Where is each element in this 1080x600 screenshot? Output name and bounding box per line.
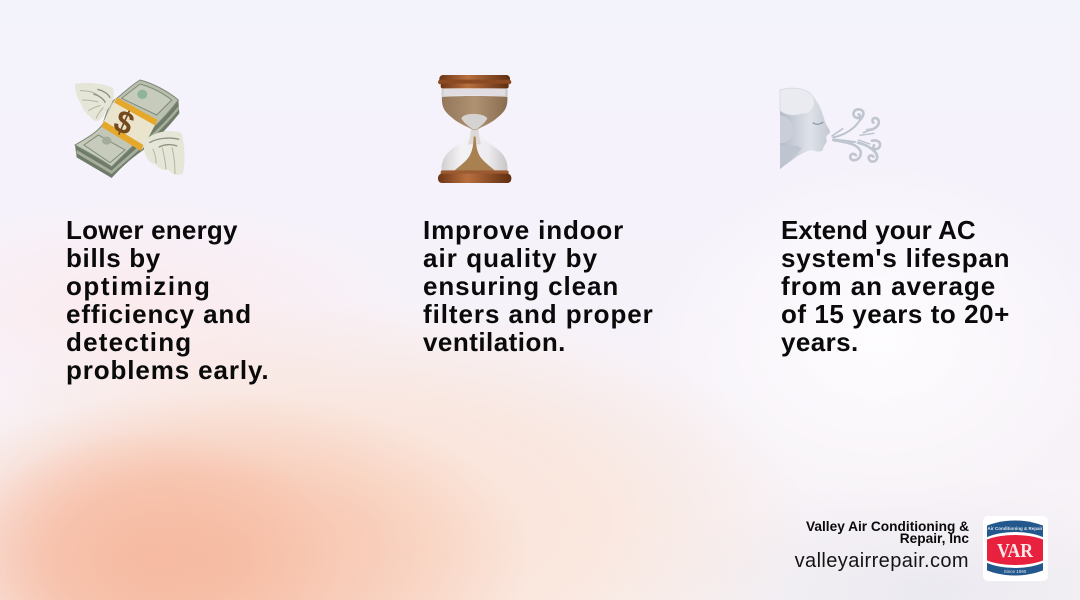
text block: lower energy bills bbox=[66, 215, 269, 385]
icon: hourglass bbox=[438, 75, 512, 183]
logo: VAR: Air Conditioning & Repair bbox=[988, 526, 1043, 531]
top cap bbox=[439, 75, 510, 83]
text block: improve indoor air quality: ensuring clean bbox=[423, 271, 619, 301]
company name bbox=[806, 519, 969, 546]
company name: Valley Air Conditioning & bbox=[806, 519, 969, 534]
text block: improve indoor air quality: ventilation. bbox=[423, 327, 566, 357]
eye bbox=[813, 122, 823, 124]
lower wing bbox=[143, 131, 185, 175]
text block: extend system lifespan bbox=[781, 215, 1010, 357]
icon: wind face bbox=[780, 88, 882, 170]
text block: lower energy bills: bills by bbox=[66, 243, 161, 273]
upper sand bbox=[442, 96, 507, 130]
upper wing bbox=[75, 83, 114, 121]
text block: extend system lifespan: years. bbox=[781, 327, 859, 357]
text block: lower energy bills: problems early. bbox=[66, 355, 269, 385]
text block: lower energy bills: Lower energy bbox=[66, 215, 238, 245]
head bbox=[780, 88, 830, 169]
text block: lower energy bills: efficiency and bbox=[66, 299, 252, 329]
text block: extend system lifespan: of 15 years to 20+ bbox=[781, 299, 1010, 329]
text block: extend system lifespan: Extend your AC bbox=[781, 215, 976, 245]
breath lines and swirls bbox=[832, 109, 880, 162]
money band bbox=[103, 98, 157, 149]
text block: improve indoor air quality: Improve indoor bbox=[423, 215, 624, 245]
text block: improve indoor air quality bbox=[423, 215, 654, 357]
text block: improve indoor air quality: filters and proper bbox=[423, 299, 654, 329]
text block: extend system lifespan: system's lifespan bbox=[781, 243, 1010, 273]
icon: money with wings bbox=[74, 80, 184, 178]
logo: VAR: VAR bbox=[997, 540, 1033, 562]
text block: lower energy bills: detecting bbox=[66, 327, 192, 357]
logo: VAR: Since 1990 bbox=[1004, 569, 1027, 574]
icon: money with wings: $ bbox=[109, 102, 140, 143]
bottom cap bbox=[441, 170, 509, 175]
stack side bbox=[75, 100, 179, 178]
logo: VAR bbox=[983, 516, 1048, 581]
text block: extend system lifespan: from an average bbox=[781, 271, 996, 301]
glass bbox=[441, 88, 508, 172]
company name: Repair, Inc bbox=[900, 531, 969, 546]
stack top bill bbox=[75, 80, 178, 167]
website url: valleyairrepair.com bbox=[795, 550, 969, 572]
text block: lower energy bills: optimizing bbox=[66, 271, 211, 301]
falling sand and pile bbox=[468, 130, 481, 144]
text block: improve indoor air quality: air quality by bbox=[423, 243, 598, 273]
hair lobes bbox=[780, 88, 815, 115]
